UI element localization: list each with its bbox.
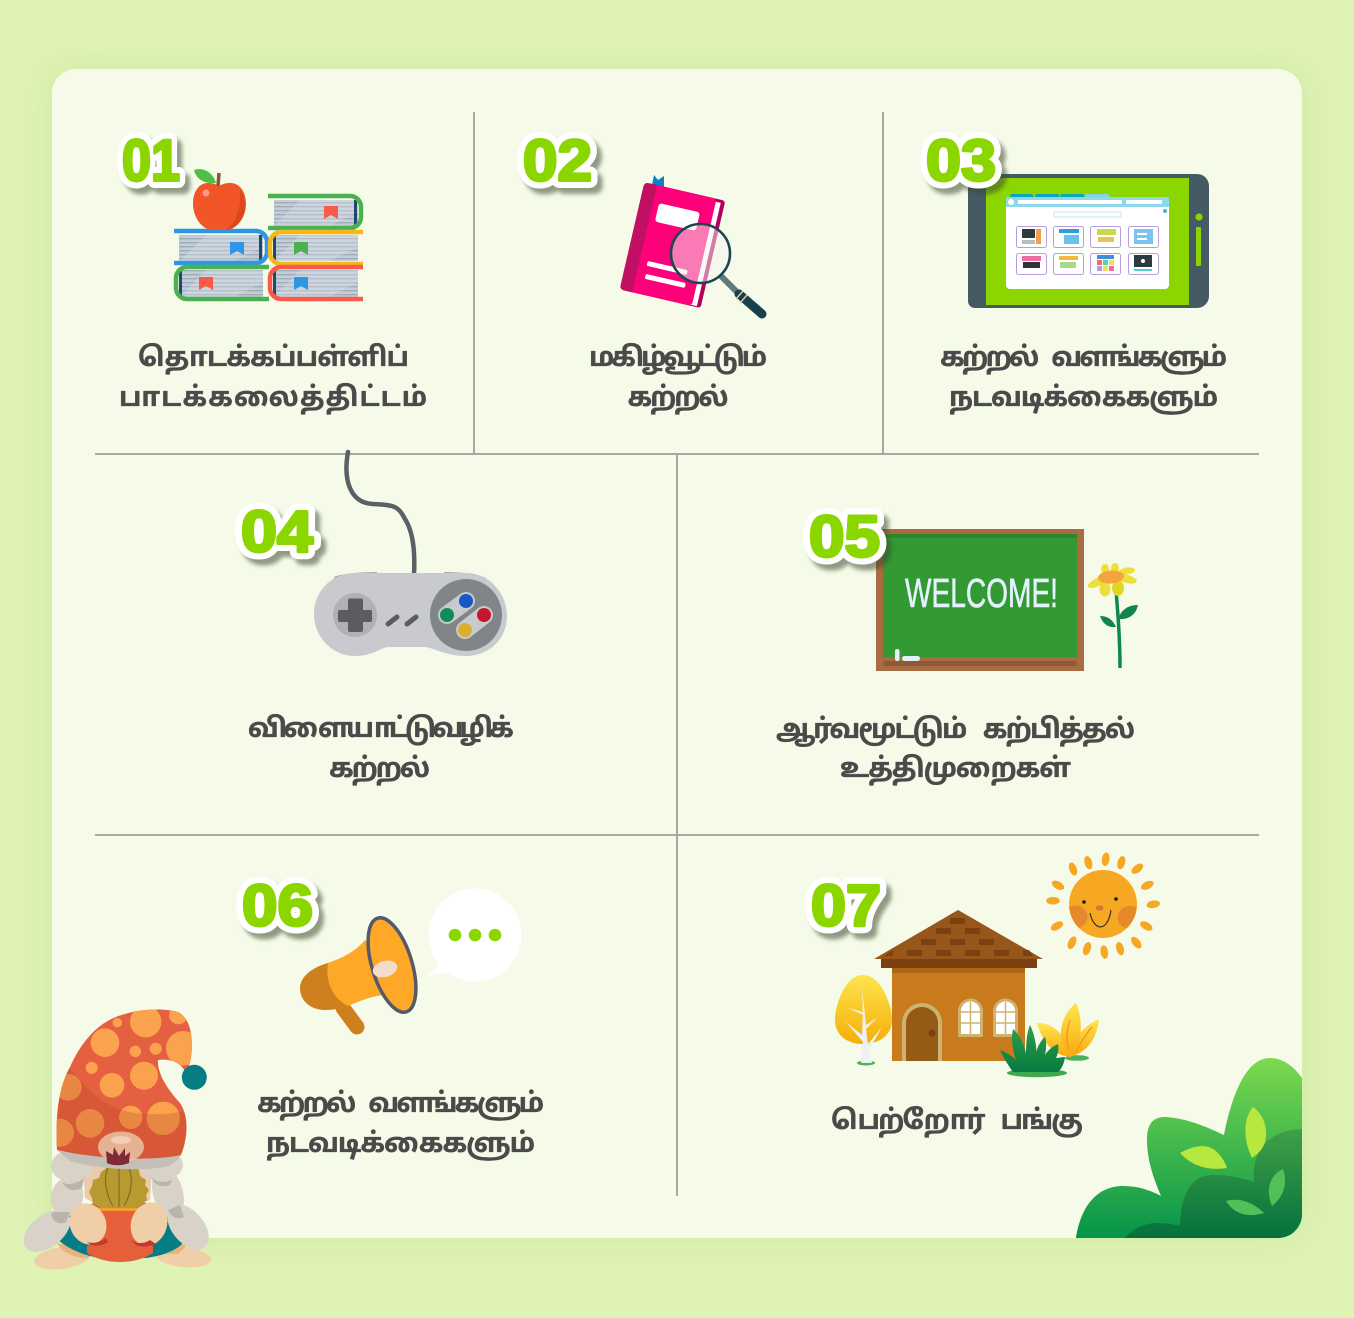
heading 03: கற்றல் வளங்களும்: [940, 342, 1227, 375]
heading 04: விளையாட்டுவழிக்: [248, 713, 514, 746]
number badge 04: 04: [241, 500, 313, 564]
number badge 02: 02: [523, 128, 592, 194]
icon: tablet with web page: [968, 174, 1209, 308]
heading 03: நடவடிக்கைகளும்: [949, 382, 1218, 415]
number badge 05: 05: [809, 504, 880, 570]
welcome text: WELCOME!: [905, 570, 1058, 616]
heading 04: [248, 713, 514, 786]
icon: speech bubble: [427, 888, 522, 982]
icon: welcome chalkboard: [876, 529, 1084, 671]
heading 01: பாடக்கலைத்திட்டம்: [119, 382, 427, 415]
icon: green shrub: [1000, 1025, 1067, 1077]
heading 02: [589, 342, 767, 415]
icon: pink book with magnifier: [620, 175, 762, 314]
icon: sun: [1046, 852, 1161, 959]
icon: game controller: [314, 452, 507, 656]
heading 01: தொடக்கப்பள்ளிப்: [138, 342, 409, 375]
number badge 04: 04: [241, 500, 313, 564]
icon: house: [874, 910, 1043, 1061]
heading 05: ஆர்வமூட்டும் கற்பித்தல்: [776, 714, 1135, 747]
heading 04: கற்றல்: [329, 753, 430, 786]
number badge 03: 03: [926, 128, 996, 194]
heading 06: [257, 1088, 544, 1161]
icon: yellow tree: [835, 975, 892, 1066]
number badge 02: 02: [523, 128, 592, 194]
number badge 06: 06: [242, 874, 313, 938]
number badge 05: 05: [809, 504, 880, 570]
heading 02: கற்றல்: [628, 382, 728, 415]
icon: yellow plant: [1037, 1003, 1099, 1061]
number badge 01: 01: [122, 128, 180, 194]
heading 01: [119, 342, 427, 415]
number badge 06: 06: [242, 874, 313, 938]
icon: gnome holding cactus: [16, 1006, 217, 1273]
number badge 01: 01: [122, 128, 180, 194]
heading 06: நடவடிக்கைகளும்: [266, 1128, 535, 1161]
icon: books and apple: [174, 169, 363, 299]
icon: corner bush: [1076, 1058, 1302, 1238]
heading 05: உத்திமுறைகள்: [840, 753, 1071, 786]
number badge 07: 07: [811, 874, 881, 938]
heading 03: [940, 342, 1227, 415]
heading 06: கற்றல் வளங்களும்: [257, 1088, 544, 1121]
heading 02: மகிழ்வூட்டும்: [589, 342, 767, 375]
heading 05: [776, 714, 1135, 786]
icon: flower: [1086, 563, 1138, 668]
heading 07: பெற்றோர் பங்கு: [831, 1105, 1083, 1138]
icon: megaphone: [300, 912, 425, 1027]
number badge 07: 07: [811, 874, 881, 938]
number badge 03: 03: [926, 128, 996, 194]
